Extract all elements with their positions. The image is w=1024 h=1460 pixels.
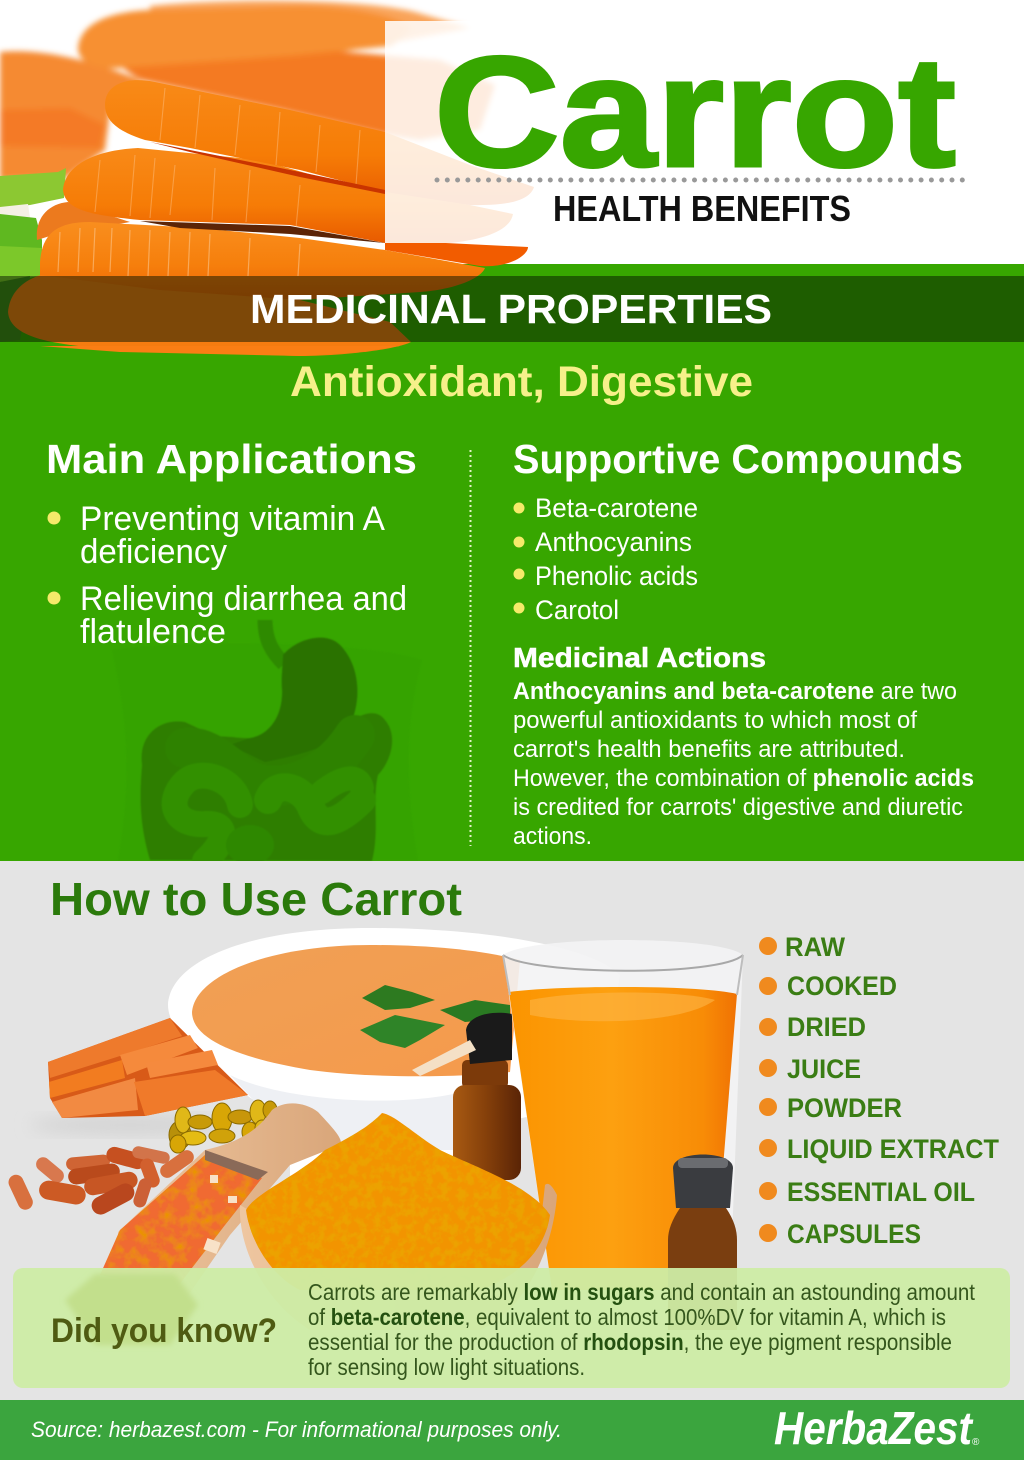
item: juice: [759, 1054, 861, 1084]
bullet list: compounds: [514, 493, 698, 625]
title overlay panel: [385, 21, 585, 243]
image: carrot stub: [37, 202, 130, 240]
bullet list: compounds: Beta-carotene: [535, 493, 698, 523]
image: soup bowl: [168, 928, 620, 1200]
text block: did you know: of beta-carotene, equivalent to almost 100%DV for vitamin A, which is: [308, 1304, 946, 1330]
panel: medicinal properties background: [0, 264, 1024, 861]
title: Carrot: Carrot: [434, 25, 956, 200]
text block: medicinal actions: is credited for carrots' digestive and diuretic: [513, 794, 963, 821]
item: dried: DRIED: [787, 1012, 866, 1042]
heading: supportive compounds: Supportive Compounds: [513, 436, 963, 482]
image: carrot lower: [40, 222, 485, 300]
text block: medicinal actions: Anthocyanins and beta-carotene are two: [513, 678, 957, 705]
text block: did you know: Carrots are remarkably low in sugars and contain an astounding amount: [308, 1279, 976, 1305]
image: carrot middle: [63, 148, 513, 243]
footer: [0, 1400, 1024, 1460]
item: cooked: COOKED: [787, 971, 897, 1001]
image: carrot top: [105, 80, 534, 205]
column divider: [470, 450, 472, 846]
text block: did you know: for sensing low light situations.: [308, 1354, 585, 1380]
image: faint carrot leaf: [65, 1274, 198, 1345]
subtitle: health benefits: HEALTH BENEFITS: [553, 188, 851, 229]
bullet list: applications: [48, 500, 407, 651]
bullet list: applications: flatulence: [80, 613, 226, 651]
bullet list: applications: Preventing vitamin A: [80, 500, 385, 538]
text block: did you know: essential for the production of rhodopsin, the eye pigment responsible: [308, 1329, 952, 1355]
item: liquid extract: LIQUID EXTRACT: [787, 1134, 999, 1164]
logo: HerbaZest: HerbaZest: [774, 1402, 973, 1454]
image: capsules: [6, 1145, 197, 1218]
list: how to use forms: [759, 932, 999, 1249]
item: raw: RAW: [785, 932, 845, 962]
image: wooden scoop and dried carrots: [100, 1103, 341, 1300]
heading: medicinal actions: Medicinal Actions: [513, 642, 766, 673]
item: juice: JUICE: [787, 1054, 861, 1084]
image: carrot tip behind: [385, 240, 528, 266]
image: carrot sticks: [30, 1018, 248, 1135]
item: raw: [759, 932, 845, 962]
text block: medicinal actions: powerful antioxidants to which most of: [513, 707, 917, 734]
panel: did you know: [13, 1268, 1010, 1388]
text block: medicinal actions: actions.: [513, 823, 592, 850]
image: carrot greens: [0, 168, 66, 342]
item: capsules: CAPSULES: [787, 1219, 921, 1249]
text block: did you know: [308, 1279, 976, 1380]
heading: main applications: Main Applications: [46, 436, 417, 482]
bullet list: compounds: Anthocyanins: [535, 527, 692, 557]
image: carrot bottom: [8, 270, 411, 356]
image: carrot powder in bowl: [240, 1113, 557, 1330]
bullet list: compounds: Carotol: [535, 595, 619, 625]
bullet list: applications: Relieving diarrhea and: [80, 580, 407, 618]
image: blurred back carrots: [0, 1, 495, 180]
bullet list: compounds: Phenolic acids: [535, 561, 698, 591]
heading: did you know: Did you know?: [51, 1312, 277, 1350]
heading: how to use carrot: How to Use Carrot: [50, 873, 462, 925]
text block: medicinal actions: [513, 678, 974, 850]
heading: medicinal properties: MEDICINAL PROPERTIES: [250, 286, 772, 332]
registered mark: ®: [972, 1437, 980, 1448]
source note: Source: herbazest.com - For informational purposes only.: [31, 1417, 562, 1442]
image: juice glass: [503, 940, 743, 1290]
image: softgels: [169, 1100, 277, 1153]
panel: main applications: [46, 436, 417, 651]
text block: medicinal actions: However, the combination of phenolic acids: [513, 765, 974, 792]
image: dropper bottle: [412, 1013, 521, 1180]
item: powder: POWDER: [787, 1093, 902, 1123]
text block: medicinal actions: carrot's health benefits are attributed.: [513, 736, 905, 763]
dotted divider: [437, 178, 967, 182]
band: medicinal properties: [0, 276, 1024, 342]
panel: how to use background: [0, 861, 1024, 1400]
image: small essential oil bottle: [668, 1154, 737, 1330]
panel: supportive compounds: [513, 436, 974, 850]
image: digestive system: [112, 620, 422, 865]
item: essential oil: ESSENTIAL OIL: [787, 1177, 975, 1207]
subheading: antioxidant, digestive: Antioxidant, Digestive: [290, 358, 753, 406]
bullet list: applications: deficiency: [80, 533, 227, 571]
